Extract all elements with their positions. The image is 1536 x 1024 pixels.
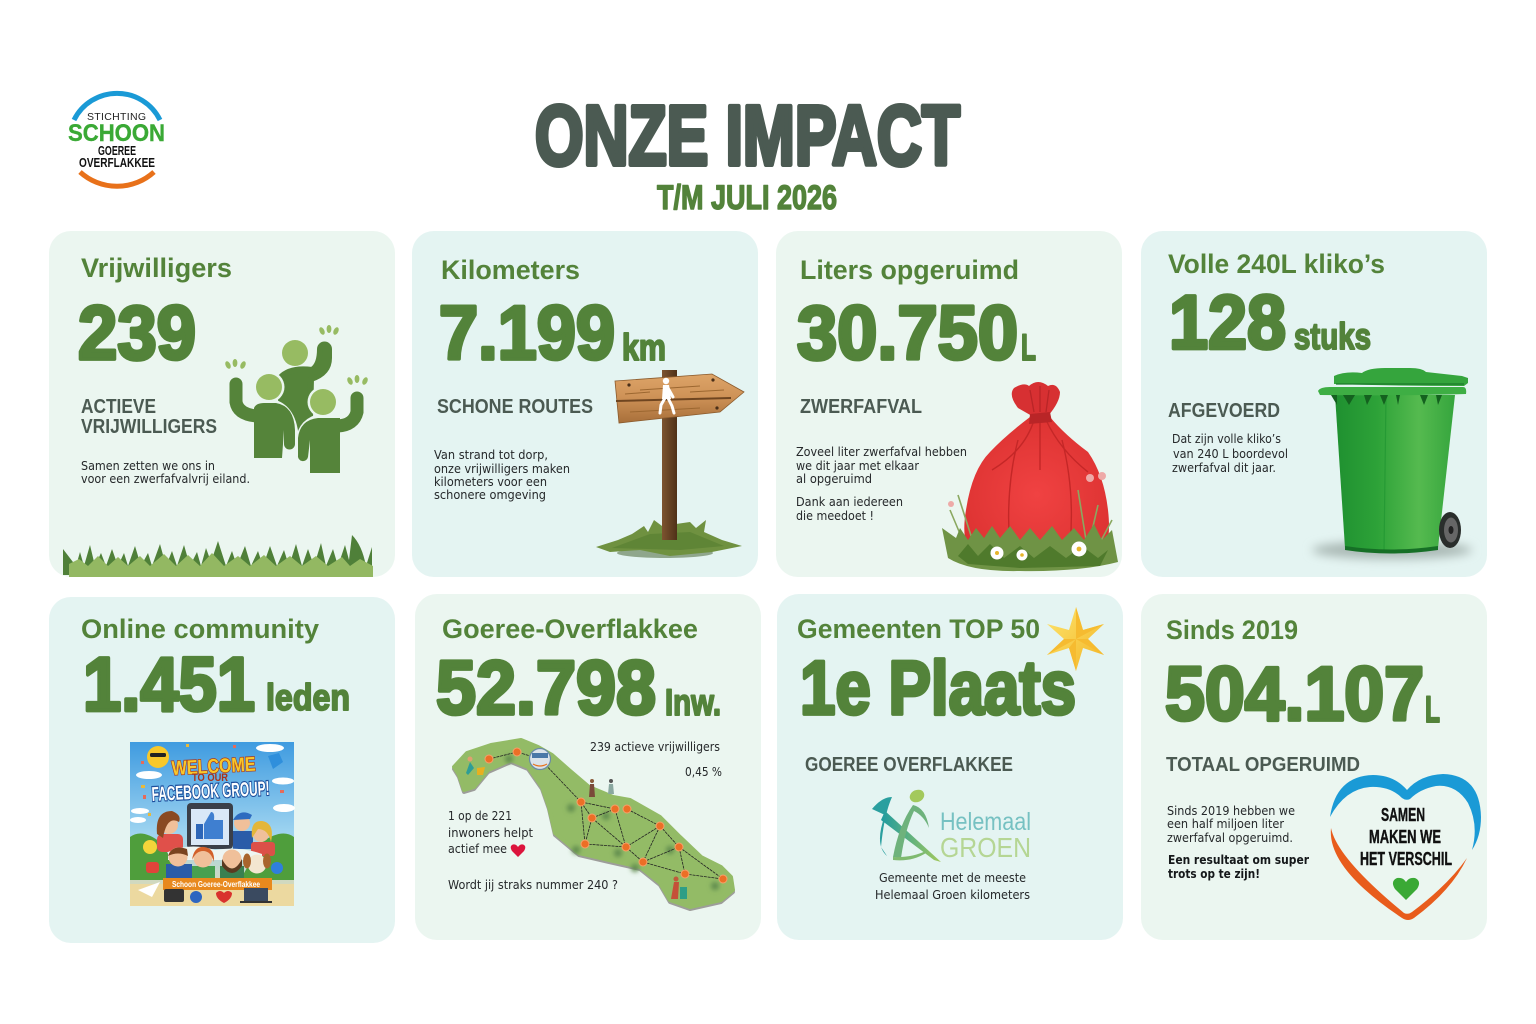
panel: kilometers: [412, 231, 758, 577]
body text: schonere omgeving: [434, 487, 546, 502]
icon: gold star: [1047, 607, 1104, 671]
icon: heart: [511, 844, 525, 857]
panel: sinds 2019: [1141, 594, 1487, 940]
logo: Stichting Schoon Goeree Overflakkee: [68, 93, 165, 186]
call to action: Wordt jij straks nummer 240 ?: [448, 877, 618, 892]
body text: voor een zwerfafvalvrij eiland.: [81, 471, 250, 486]
ranking: 1e Plaats: [800, 646, 1076, 731]
body text: Sinds 2019 hebben we: [1167, 803, 1295, 818]
card background: [412, 231, 758, 577]
body text: we dit jaar met elkaar: [796, 458, 920, 473]
panel: liters opgeruimd: [776, 231, 1122, 577]
logo: Stichting Schoon Goeree Overflakkee: GOEREE: [98, 143, 136, 158]
body text: [1172, 431, 1288, 475]
subheading: ZWERFAFVAL: [800, 396, 922, 418]
unit: leden: [266, 677, 350, 718]
number: 30.750: [797, 291, 1018, 376]
heading: Kilometers: [441, 255, 580, 285]
emphasis text: [1168, 852, 1310, 881]
body text: onze vrijwilligers maken: [434, 461, 570, 476]
panel: kliko's: [1141, 231, 1487, 577]
illustration: wooden signpost with walker: [596, 370, 744, 558]
number: 128: [1169, 280, 1286, 366]
body text: Van strand tot dorp,: [434, 447, 548, 462]
body text: zwerfafval opgeruimd.: [1167, 830, 1293, 845]
icon: three cheering volunteers: [224, 325, 369, 473]
number: 7.199: [439, 291, 615, 376]
card background: [776, 231, 1122, 577]
unit: Inw.: [665, 682, 721, 723]
card background: [415, 594, 761, 940]
subheading: VRIJWILLIGERS: [81, 416, 217, 438]
body text: [434, 447, 570, 502]
illustration: welcome to our facebook group poster: TO OUR: [192, 772, 228, 784]
number: 52.798: [436, 646, 656, 731]
logo: Helemaal Groen: [872, 787, 1031, 863]
number: 1.451: [83, 642, 255, 728]
text: volunteers and share: [590, 739, 722, 779]
subheading: ACTIEVE: [81, 396, 156, 418]
body text: Zoveel liter zwerfafval hebben: [796, 444, 967, 459]
text: 1 in 221: inwoners helpt: [448, 825, 533, 840]
text: 1 in 221: actief mee: [448, 841, 507, 856]
illustration: welcome to our facebook group poster: [130, 742, 295, 906]
panel: vrijwilligers: [49, 231, 395, 577]
body text: Gemeente met de meeste: [879, 870, 1026, 885]
text: 1 in 221: [448, 808, 533, 856]
logo: Stichting Schoon Goeree Overflakkee: OVERFLAKKEE: [79, 155, 155, 170]
panel: online community: [49, 597, 395, 943]
body text: kilometers voor een: [434, 474, 547, 489]
subheading: SCHONE ROUTES: [437, 396, 593, 418]
body text: [81, 458, 250, 486]
illustration: grass strip: [63, 535, 373, 577]
emphasis text: trots op te zijn!: [1168, 866, 1260, 881]
number: 239: [78, 291, 196, 376]
body text: zwerfafval dit jaar.: [1172, 460, 1276, 475]
map: island with cleanup route: [454, 740, 733, 909]
emphasis text: Een resultaat om super: [1168, 852, 1310, 867]
subheading: TOTAAL OPGERUIMD: [1166, 754, 1360, 776]
card background: [777, 594, 1123, 940]
body text: Samen zetten we ons in: [81, 458, 215, 473]
heading: Gemeenten TOP 50: [797, 614, 1040, 644]
illustration: welcome to our facebook group poster: Schoon Goeree-Overflakkee: [172, 880, 260, 889]
unit: L: [1425, 689, 1440, 730]
subtitle: T/M JULI 2026: [657, 179, 837, 217]
unit: L: [1021, 327, 1036, 368]
illustration: welcome to our facebook group poster: WELCOME: [171, 754, 256, 780]
body text: al opgeruimd: [796, 471, 872, 486]
illustration: green wheelie bin: [1312, 368, 1472, 559]
logo: Stichting Schoon Goeree Overflakkee: STICHTING: [87, 111, 146, 123]
icon: heart outline with slogan: [1330, 774, 1481, 920]
heading: Sinds 2019: [1166, 615, 1298, 645]
subheading: AFGEVOERD: [1168, 400, 1280, 422]
body text: Helemaal Groen kilometers: [875, 887, 1030, 902]
body text: een half miljoen liter: [1167, 816, 1285, 831]
title: ONZE IMPACT: [535, 88, 960, 182]
heading: Volle 240L kliko’s: [1168, 249, 1385, 279]
body text: die meedoet !: [796, 508, 874, 523]
panel: gemeenten top 50: [777, 594, 1123, 940]
heading: Vrijwilligers: [81, 253, 232, 283]
heading: Online community: [81, 614, 319, 644]
logo: Stichting Schoon Goeree Overflakkee: SCHOON: [68, 120, 165, 147]
text: volunteers and share: 239 actieve vrijwilligers: [590, 739, 720, 754]
heading: Liters opgeruimd: [800, 255, 1019, 285]
icon: heart outline with slogan: HET VERSCHIL: [1360, 848, 1452, 869]
card background: [49, 231, 395, 577]
text: volunteers and share: 0,45 %: [685, 764, 722, 779]
logo: Helemaal Groen: GROEN: [940, 832, 1031, 863]
unit: km: [622, 327, 666, 368]
illustration: red garbage bag in grass: [942, 382, 1118, 571]
subheading: GOEREE OVERFLAKKEE: [805, 754, 1013, 776]
icon: heart outline with slogan: SAMEN: [1381, 804, 1425, 825]
body text: [875, 870, 1030, 902]
card background: [49, 597, 395, 943]
text: 1 in 221: 1 op de 221: [448, 808, 512, 823]
number: 504.107: [1165, 652, 1424, 737]
body text: [1167, 803, 1295, 845]
body text: [796, 444, 967, 523]
card background: [1141, 231, 1487, 577]
body text: van 240 L boordevol: [1173, 446, 1288, 461]
logo: Helemaal Groen: Helemaal: [940, 808, 1031, 836]
illustration: welcome to our facebook group poster: FACEBOOK GROUP!: [151, 778, 270, 806]
subheading: [81, 396, 217, 438]
panel: goeree-overflakkee: [415, 594, 761, 940]
icon: heart outline with slogan: MAKEN WE: [1369, 826, 1441, 847]
card background: [1141, 594, 1487, 940]
unit: stuks: [1294, 316, 1371, 357]
heading: Goeree-Overflakkee: [442, 614, 698, 644]
body text: Dank aan iedereen: [796, 494, 903, 509]
body text: Dat zijn volle kliko’s: [1172, 431, 1281, 446]
